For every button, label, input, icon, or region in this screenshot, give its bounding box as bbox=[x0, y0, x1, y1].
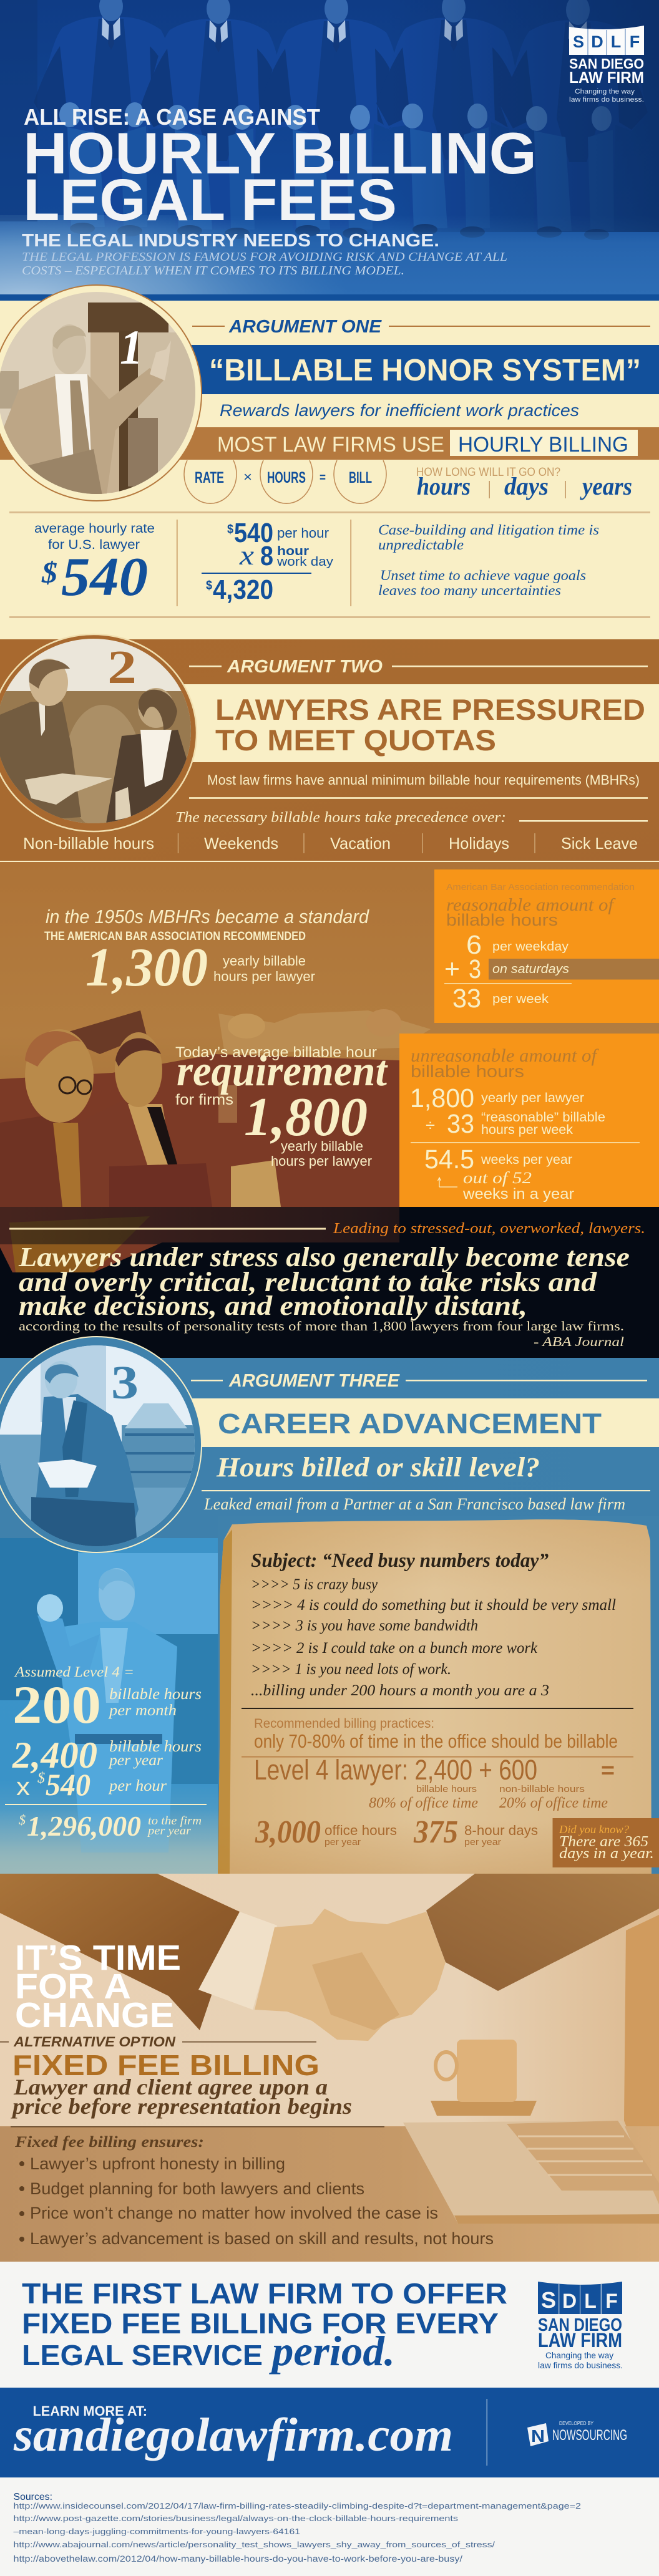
text: 1950s standard: 1,300 bbox=[85, 937, 208, 998]
subtitle: THE LEGAL INDUSTRY NEEDS TO CHANGE. bbox=[22, 231, 439, 251]
formula: rate x hours = bill: × bbox=[243, 469, 252, 485]
text: case-building notes: Case-building and litigation time is bbox=[378, 522, 599, 538]
sources: http://www.abajournal.com/news/article/personality_test_shows_lawyers_shy_away_from_sources_of_stress/ bbox=[14, 2540, 495, 2549]
list: things sacrificed: Holidays bbox=[449, 834, 509, 853]
quote text: and overly critical, reluctant to take risks and bbox=[19, 1267, 597, 1297]
panel: stats on photo: billable hours bbox=[109, 1686, 202, 1703]
text: case-building notes: leaves too many uncertainties bbox=[378, 583, 561, 598]
list: fixed fee billing ensures: Lawyer’s advancement is based on skill and results, not hours bbox=[30, 2229, 494, 2248]
text: case-building notes bbox=[378, 522, 599, 598]
text: today's requirement: hours per lawyer bbox=[271, 1153, 372, 1169]
sources: –mean-long-days-juggling-commitments-for-young-lawyers-64161 bbox=[14, 2527, 300, 2536]
header: argument two: ARGUMENT TWO bbox=[227, 657, 383, 677]
text: today's requirement: requirement bbox=[177, 1047, 388, 1095]
panel: stats on photo: billable hours bbox=[109, 1738, 202, 1755]
logo: San Diego Law Firm: law firms do business. bbox=[538, 2360, 623, 2370]
panel: argument two bbox=[0, 634, 659, 862]
panel: stats on photo: x bbox=[16, 1773, 30, 1801]
heading: first law firm: LEGAL SERVICE bbox=[22, 2339, 263, 2371]
calculation: daily billing bbox=[202, 518, 333, 605]
office hours and days result: 8-hour days bbox=[464, 1823, 538, 1838]
list: things sacrificed: Non-billable hours bbox=[23, 834, 154, 853]
calculation: daily billing: 4,320 bbox=[213, 574, 273, 605]
heading: it's time for a change: FOR A bbox=[15, 1967, 131, 2007]
list: fixed fee billing ensures: Lawyer’s upfront honesty in billing bbox=[30, 2154, 285, 2173]
panel: argument one bbox=[0, 285, 659, 639]
logo: San Diego Law Firm: S bbox=[573, 32, 584, 51]
text: rewards lawyers: Rewards lawyers for inefficient work practices bbox=[220, 401, 579, 420]
logo: San Diego Law Firm: D bbox=[591, 32, 603, 51]
stat: average hourly rate $540: for U.S. lawyer bbox=[48, 538, 140, 552]
banner: career advancement bbox=[181, 1398, 659, 1447]
panel: reasonable hours: on saturdays bbox=[492, 962, 569, 976]
panel: reasonable hours: 3 bbox=[469, 954, 481, 984]
panel: stats on photo: per year bbox=[108, 1752, 163, 1769]
list: things sacrificed: Weekends bbox=[204, 834, 278, 853]
panel: stats on photo: 540 bbox=[46, 1767, 90, 1802]
banner: lawyers are pressured to meet quotas bbox=[181, 684, 659, 762]
calculation: daily billing: hour bbox=[277, 545, 309, 558]
panel: stats on photo: $ bbox=[19, 1812, 26, 1828]
heading: first law firm: FIXED FEE BILLING FOR EVERY bbox=[22, 2307, 499, 2340]
panel: unreasonable hours: weeks per year bbox=[481, 1153, 572, 1167]
sources: http://www.insidecounsel.com/2012/04/17/law-firm-billing-rates-steadily-climbing-despite-d?t=department-management&page=2 bbox=[14, 2502, 581, 2511]
panel: parchment email bbox=[218, 1519, 659, 1874]
panel: unreasonable hours: 1,800 bbox=[410, 1083, 474, 1113]
level 4 lawyer formula: 20% of office time bbox=[499, 1795, 608, 1811]
list: fixed fee billing ensures: Fixed fee billing ensures: bbox=[14, 2134, 204, 2151]
panel: unreasonable hours: hours per week bbox=[481, 1123, 574, 1137]
oval photo: lawyer and client bbox=[0, 634, 200, 831]
logo: San Diego Law Firm: L bbox=[584, 2290, 597, 2312]
logo: NowSourcing: N bbox=[531, 2426, 545, 2446]
panel: stats on photo: per month bbox=[108, 1702, 177, 1719]
banner: lawyers are pressured to meet quotas: LAWYERS ARE PRESSURED bbox=[215, 693, 645, 726]
office hours and days result: per year bbox=[464, 1837, 501, 1847]
sources: http://abovethelaw.com/2012/04/how-many-billable-hours-do-you-have-to-work-before-you-are-busy/ bbox=[14, 2554, 462, 2564]
calculation: daily billing: 8 bbox=[260, 541, 273, 571]
band: most law firms use hourly billing bbox=[0, 427, 659, 460]
how long will it go on bbox=[416, 466, 632, 500]
office hours and days result: 3,000 bbox=[255, 1814, 321, 1850]
panel: unreasonable hours: ÷ bbox=[426, 1116, 435, 1135]
recommended billing practices bbox=[254, 1717, 618, 1752]
logo: NowSourcing: DEVELOPED BY bbox=[559, 2421, 594, 2426]
text: hours billed or skill level: Hours billed or skill level? bbox=[216, 1452, 540, 1483]
text: case-building notes: Unset time to achieve vague goals bbox=[380, 568, 586, 583]
panel: reasonable hours: American Bar Association recommendation bbox=[446, 882, 635, 893]
how long will it go on: hours bbox=[417, 472, 471, 500]
band: most law firms use hourly billing: HOURLY BILLING bbox=[458, 433, 628, 457]
list: fixed fee billing ensures: Price won’t change no matter how involved the case is bbox=[30, 2204, 438, 2222]
callout: did you know: Did you know? bbox=[559, 1823, 629, 1836]
banner: billable honor system: “BILLABLE HONOR SYSTEM” bbox=[209, 354, 641, 387]
number 2: 2 bbox=[107, 641, 137, 694]
text: learn more at: LEARN MORE AT: bbox=[32, 2403, 147, 2419]
panel: hero header bbox=[0, 0, 659, 294]
panel: stats on photo: to the firm bbox=[148, 1814, 202, 1828]
heading: it's time for a change: IT’S TIME bbox=[15, 1938, 181, 1978]
list: things sacrificed bbox=[23, 833, 638, 853]
panel: learn more footer band bbox=[0, 2388, 659, 2477]
stat: average hourly rate $540: 540 bbox=[61, 547, 148, 608]
panel: stress quote bbox=[0, 1207, 659, 1358]
heading: first law firm: period. bbox=[269, 2327, 395, 2375]
logo: San Diego Law Firm bbox=[538, 2282, 623, 2370]
photo: two men reading bbox=[0, 1009, 431, 1207]
panel: unreasonable hours: “reasonable” billable bbox=[481, 1110, 605, 1125]
heading: it's time for a change: CHANGE bbox=[15, 1995, 174, 2035]
email subject and lines: >>>> 5 is crazy busy bbox=[251, 1576, 378, 1593]
text: leaked email: Leaked email from a Partner at a San Francisco based law firm bbox=[203, 1495, 625, 1513]
text: lawyer and client agree: price before representation begins bbox=[11, 2094, 352, 2119]
text: 1950s standard: in the 1950s MBHRs became a standard bbox=[46, 906, 370, 927]
heading: first law firm bbox=[22, 2277, 507, 2375]
photo: man with raised fist bbox=[0, 1538, 218, 1874]
hero photo: seated judges bbox=[0, 0, 659, 294]
panel: unreasonable hours: yearly per lawyer bbox=[481, 1091, 584, 1105]
email subject and lines: Subject: “Need busy numbers today” bbox=[251, 1549, 549, 1571]
logo: San Diego Law Firm: SAN DIEGO bbox=[569, 56, 644, 72]
heading: fixed fee billing: FIXED FEE BILLING bbox=[12, 2049, 320, 2081]
list: things sacrificed: Sick Leave bbox=[561, 834, 638, 853]
list: fixed fee billing ensures: Budget planning for both lawyers and clients bbox=[30, 2179, 364, 2198]
band: most law firms use hourly billing: MOST LAW FIRMS USE bbox=[217, 433, 444, 457]
panel: unreasonable hours: billable hours bbox=[411, 1062, 524, 1081]
logo: San Diego Law Firm: F bbox=[605, 2290, 618, 2312]
oval photo: man pointing bbox=[0, 285, 206, 501]
calculation: daily billing: per hour bbox=[277, 525, 329, 541]
number 1: 1 bbox=[120, 320, 143, 374]
logo: San Diego Law Firm: SAN DIEGO bbox=[538, 2315, 622, 2335]
stat: average hourly rate $540: average hourly rate bbox=[34, 521, 155, 536]
panel: reasonable hours: 33 bbox=[452, 984, 481, 1014]
quote text bbox=[18, 1242, 630, 1349]
text: today's requirement bbox=[175, 1044, 388, 1169]
url: sandiegolawfirm.com: sandiegolawfirm.com bbox=[13, 2409, 453, 2461]
text: take precedence: The necessary billable hours take precedence over: bbox=[175, 810, 506, 826]
callout: leading to stressed-out lawyers: Leading to stressed-out, overworked, lawyers. bbox=[333, 1221, 645, 1237]
title: Hourly Billing: HOURLY BILLING bbox=[23, 120, 537, 186]
email subject and lines: >>>> 2 is I could take on a bunch more work bbox=[251, 1640, 538, 1657]
formula: rate x hours = bill: = bbox=[320, 471, 326, 485]
how long will it go on: HOW LONG WILL IT GO ON? bbox=[416, 466, 560, 479]
panel: unreasonable hours: 33 bbox=[447, 1109, 474, 1139]
recommended billing practices: Recommended billing practices: bbox=[254, 1717, 434, 1731]
logo: NowSourcing bbox=[527, 2421, 627, 2446]
callout: did you know: There are 365 bbox=[559, 1834, 648, 1850]
header: argument one: ARGUMENT ONE bbox=[228, 317, 383, 337]
logo: San Diego Law Firm: law firms do business. bbox=[569, 96, 644, 104]
text: 1950s standard: yearly billable bbox=[223, 953, 306, 969]
logo: San Diego Law Firm: Changing the way bbox=[545, 2350, 613, 2360]
text: today's requirement: Today’s average billable hour bbox=[175, 1044, 377, 1061]
panel: closing statement bbox=[0, 2262, 659, 2388]
logo: San Diego Law Firm: S bbox=[541, 2287, 556, 2313]
title: Legal Fees: LEGAL FEES bbox=[23, 167, 397, 233]
stat: average hourly rate $540 bbox=[34, 521, 155, 608]
logo: San Diego Law Firm: D bbox=[562, 2290, 577, 2312]
office hours and days result: 375 bbox=[413, 1814, 458, 1850]
callout: did you know bbox=[553, 1818, 659, 1867]
banner: career advancement: CAREER ADVANCEMENT bbox=[218, 1408, 602, 1440]
panel: reasonable hours: + bbox=[444, 954, 460, 984]
panel: it's time for a change bbox=[0, 1874, 659, 2262]
label: alternative option: ALTERNATIVE OPTION bbox=[13, 2034, 176, 2050]
level 4 lawyer formula: Level 4 lawyer: 2,400 + 600 bbox=[254, 1754, 537, 1786]
intro text: COSTS – ESPECIALLY WHEN IT COMES TO ITS BILLING MODEL. bbox=[22, 264, 404, 278]
email subject and lines: >>>> 3 is you have some bandwidth bbox=[251, 1617, 478, 1634]
level 4 lawyer formula: non-billable hours bbox=[499, 1784, 585, 1794]
text: 1950s standard: THE AMERICAN BAR ASSOCIATION RECOMMENDED bbox=[44, 930, 306, 943]
panel: unreasonable hours: 54.5 bbox=[424, 1145, 474, 1174]
panel: reasonable hours: billable hours bbox=[446, 911, 558, 929]
logo: San Diego Law Firm: L bbox=[611, 32, 621, 51]
panel: reasonable hours bbox=[434, 869, 659, 1023]
photo: handshake, mug and laptop bbox=[0, 1874, 659, 2262]
email subject and lines: ...billing under 200 hours a month you are a 3 bbox=[251, 1682, 549, 1699]
logo: San Diego Law Firm bbox=[569, 26, 644, 104]
oval photo: man with papers bbox=[0, 1337, 203, 1552]
logo: San Diego Law Firm: Changing the way bbox=[575, 88, 635, 95]
quote text: make decisions, and emotionally distant, bbox=[19, 1290, 527, 1321]
calculation: daily billing: x bbox=[239, 540, 255, 571]
calculation: daily billing: $ bbox=[206, 579, 212, 593]
text: 1950s standard bbox=[44, 906, 370, 998]
calculation: daily billing: work day bbox=[276, 555, 333, 569]
calculation: daily billing: $ bbox=[227, 523, 233, 536]
quote text: according to the results of personality tests of more than 1,800 lawyers from four large law firms. bbox=[19, 1319, 624, 1334]
sources bbox=[14, 2492, 581, 2564]
panel: reasonable hours: per weekday bbox=[492, 940, 569, 954]
sources: http://www.post-gazette.com/stories/business/legal/always-on-the-clock-billable-hours-requirements bbox=[14, 2514, 458, 2523]
stat: average hourly rate $540: $ bbox=[41, 556, 57, 589]
text: today's requirement: yearly billable bbox=[281, 1138, 363, 1154]
panel: MBHR history with photo bbox=[0, 862, 659, 1207]
level 4 lawyer formula: billable hours bbox=[416, 1784, 477, 1794]
logo: San Diego Law Firm: F bbox=[630, 32, 640, 51]
header: argument three: ARGUMENT THREE bbox=[228, 1371, 401, 1391]
logo: San Diego Law Firm: LAW FIRM bbox=[538, 2329, 622, 2351]
office hours and days result: office hours bbox=[325, 1823, 397, 1838]
panel: stats on photo: 200 bbox=[12, 1675, 101, 1735]
panel: reasonable hours: reasonable amount of bbox=[446, 895, 616, 915]
number 3: 3 bbox=[111, 1357, 139, 1409]
list: things sacrificed: Vacation bbox=[330, 834, 391, 853]
formula: rate x hours = bill bbox=[184, 460, 386, 503]
panel: argument three bbox=[0, 1337, 659, 1874]
panel: reasonable hours: per week bbox=[492, 992, 549, 1006]
panel: stats on photo: $ bbox=[37, 1770, 45, 1786]
level 4 lawyer formula: = bbox=[601, 1757, 615, 1783]
text: today's requirement: 1,800 bbox=[244, 1087, 368, 1148]
email subject and lines: >>>> 4 is could do something but it should be very small bbox=[251, 1597, 616, 1614]
panel: stats on photo: 1,296,000 bbox=[27, 1810, 141, 1842]
calculation: daily billing: 540 bbox=[234, 518, 273, 548]
logo: San Diego Law Firm: LAW FIRM bbox=[569, 68, 644, 87]
panel: stats on photo bbox=[5, 1664, 207, 1842]
formula: rate x hours = bill: BILL bbox=[349, 469, 372, 487]
panel: unreasonable hours: unreasonable amount of bbox=[411, 1045, 599, 1066]
panel: stats on photo: 2,400 bbox=[12, 1735, 97, 1776]
panel: unreasonable hours: out of 52 bbox=[463, 1169, 532, 1187]
panel: unreasonable hours: weeks in a year bbox=[462, 1186, 574, 1203]
panel: stats on photo: per hour bbox=[108, 1778, 167, 1794]
intro text: THE LEGAL PROFESSION IS FAMOUS FOR AVOIDING RISK AND CHANGE AT ALL bbox=[22, 250, 507, 264]
quote text: Lawyers under stress also generally become tense bbox=[18, 1242, 630, 1272]
text: case-building notes: unpredictable bbox=[378, 537, 464, 553]
banner: lawyers are pressured to meet quotas: TO MEET QUOTAS bbox=[215, 724, 496, 757]
formula: rate x hours = bill: RATE bbox=[195, 469, 224, 487]
panel: stats on photo: per year bbox=[147, 1824, 192, 1838]
panel: unreasonable hours bbox=[399, 1034, 659, 1207]
text: MBHRs: Most law firms have annual minimum billable hour requirements (MBHRs) bbox=[207, 772, 640, 788]
email subject and lines bbox=[251, 1549, 616, 1699]
list: fixed fee billing ensures bbox=[14, 2134, 494, 2248]
banner: billable honor system bbox=[181, 345, 659, 394]
heading: it's time for a change bbox=[15, 1938, 181, 2035]
panel: reasonable hours: 6 bbox=[466, 930, 482, 960]
text: lawyer and client agree: Lawyer and client agree upon a bbox=[13, 2075, 328, 2099]
sources: Sources: bbox=[14, 2492, 52, 2502]
panel: stats on photo: Assumed Level 4 = bbox=[14, 1664, 134, 1680]
text: today's requirement: for firms bbox=[175, 1092, 233, 1108]
heading: first law firm: THE FIRST LAW FIRM TO OFFER bbox=[22, 2277, 507, 2310]
callout: did you know: days in a year. bbox=[559, 1846, 654, 1862]
title: All Rise: ALL RISE: A CASE AGAINST bbox=[24, 104, 320, 130]
email subject and lines: >>>> 1 is you need lots of work. bbox=[251, 1661, 451, 1678]
level 4 lawyer formula bbox=[254, 1754, 615, 1811]
office hours and days result bbox=[255, 1814, 538, 1850]
text: lawyer and client agree bbox=[11, 2075, 352, 2119]
formula: rate x hours = bill: HOURS bbox=[267, 469, 306, 487]
how long will it go on: years bbox=[580, 472, 632, 500]
quote text: - ABA Journal bbox=[534, 1334, 624, 1349]
text: 1950s standard: hours per lawyer bbox=[213, 969, 315, 984]
level 4 lawyer formula: 80% of office time bbox=[369, 1795, 478, 1811]
intro text bbox=[22, 250, 507, 278]
office hours and days result: per year bbox=[325, 1837, 361, 1847]
how long will it go on: days bbox=[504, 472, 549, 500]
